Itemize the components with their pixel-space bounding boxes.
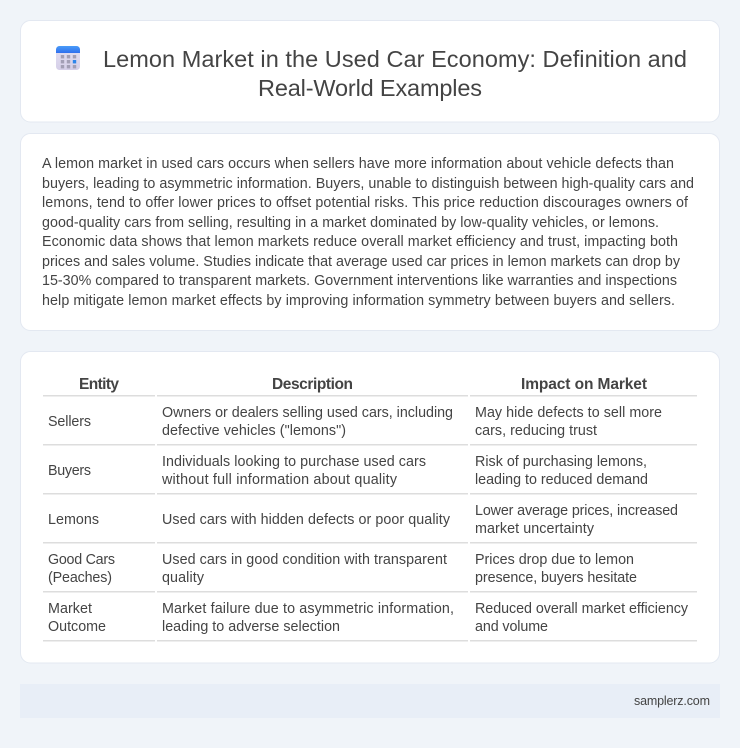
table row: good cars: quality bbox=[162, 570, 205, 586]
table row: good cars bbox=[43, 552, 697, 592]
table row: sellers: Sellers bbox=[48, 414, 91, 430]
text block: definition of lemon market: buyers, leading to asymmetric information. Buyers, unable to distinguish between high-quality cars and bbox=[42, 176, 694, 192]
table row: buyers bbox=[43, 454, 697, 494]
text block: definition of lemon market: prices and sales volume. Studies indicate that average used car prices in lemon markets can drop by bbox=[42, 254, 681, 270]
panel: introduction paragraph bbox=[20, 134, 720, 330]
table row: buyers: leading to reduced demand bbox=[475, 472, 648, 488]
table row: market outcome: Market failure due to asymmetric information, bbox=[162, 601, 454, 617]
table row: buyers: without full information about quality bbox=[161, 472, 398, 488]
table row: lemons: market uncertainty bbox=[475, 521, 595, 537]
table row: buyers: Individuals looking to purchase used cars bbox=[162, 454, 426, 470]
table header bbox=[43, 376, 697, 396]
title: Lemon Market in the Used Car Economy: Definition and bbox=[103, 46, 687, 72]
table row: lemons bbox=[43, 503, 697, 544]
table row: good cars: Used cars in good condition with transparent bbox=[162, 552, 447, 568]
panel: title card bbox=[20, 20, 720, 122]
table row: market outcome: and volume bbox=[475, 619, 548, 635]
table row: market outcome: Market bbox=[48, 601, 92, 617]
table header: Impact on Market bbox=[521, 376, 647, 393]
table row: buyers: Buyers bbox=[48, 463, 91, 479]
table row: sellers: cars, reducing trust bbox=[475, 423, 597, 439]
table row: sellers: May hide defects to sell more bbox=[475, 405, 662, 421]
icon: calendar bbox=[56, 46, 80, 70]
table row: market outcome: Outcome bbox=[48, 619, 106, 635]
text block: definition of lemon market: A lemon market in used cars occurs when sellers have more information about vehicle defects than bbox=[42, 156, 674, 172]
title: Real-World Examples bbox=[258, 75, 482, 101]
text block: definition of lemon market: 15-30% compared to transparent markets. Government interventions like warranties and inspections bbox=[42, 273, 677, 289]
table row: market outcome bbox=[43, 601, 697, 642]
footer: samplerz.com bbox=[634, 694, 710, 708]
table header: Description bbox=[272, 376, 353, 393]
text block: definition of lemon market: Economic data shows that lemon markets reduce overall market efficiency and trust, impacting both bbox=[42, 234, 678, 250]
table row: market outcome: Reduced overall market efficiency bbox=[475, 601, 689, 617]
title bbox=[103, 46, 687, 101]
text block: definition of lemon market bbox=[42, 156, 694, 309]
table row: lemons: Lower average prices, increased bbox=[475, 503, 678, 519]
panel: table card bbox=[20, 352, 720, 663]
table row: good cars: (Peaches) bbox=[48, 570, 112, 586]
footer bbox=[20, 684, 720, 718]
table row: sellers bbox=[43, 405, 697, 446]
table row: sellers: Owners or dealers selling used cars, including bbox=[162, 405, 453, 421]
table row: lemons: Used cars with hidden defects or poor quality bbox=[162, 512, 451, 528]
table row: good cars: Good Cars bbox=[48, 552, 115, 568]
table row: sellers: defective vehicles ("lemons") bbox=[162, 423, 346, 439]
text block: definition of lemon market: good-quality cars from selling, resulting in a market dominated by low-quality vehicles, or lemons. bbox=[42, 215, 659, 231]
table header: Entity bbox=[79, 376, 119, 393]
table row: good cars: Prices drop due to lemon bbox=[475, 552, 634, 568]
table row: buyers: Risk of purchasing lemons, bbox=[475, 454, 647, 470]
table row: market outcome: leading to adverse selection bbox=[162, 619, 340, 635]
table row: good cars: presence, buyers hesitate bbox=[475, 570, 637, 586]
text block: definition of lemon market: help mitigate lemon market effects by improving information symmetry between buyers and sellers. bbox=[42, 293, 675, 309]
text block: definition of lemon market: lemons, tend to offer lower prices to offset potential risks. This price reduction discourages owners of bbox=[42, 195, 688, 211]
table row: lemons: Lemons bbox=[48, 512, 99, 528]
